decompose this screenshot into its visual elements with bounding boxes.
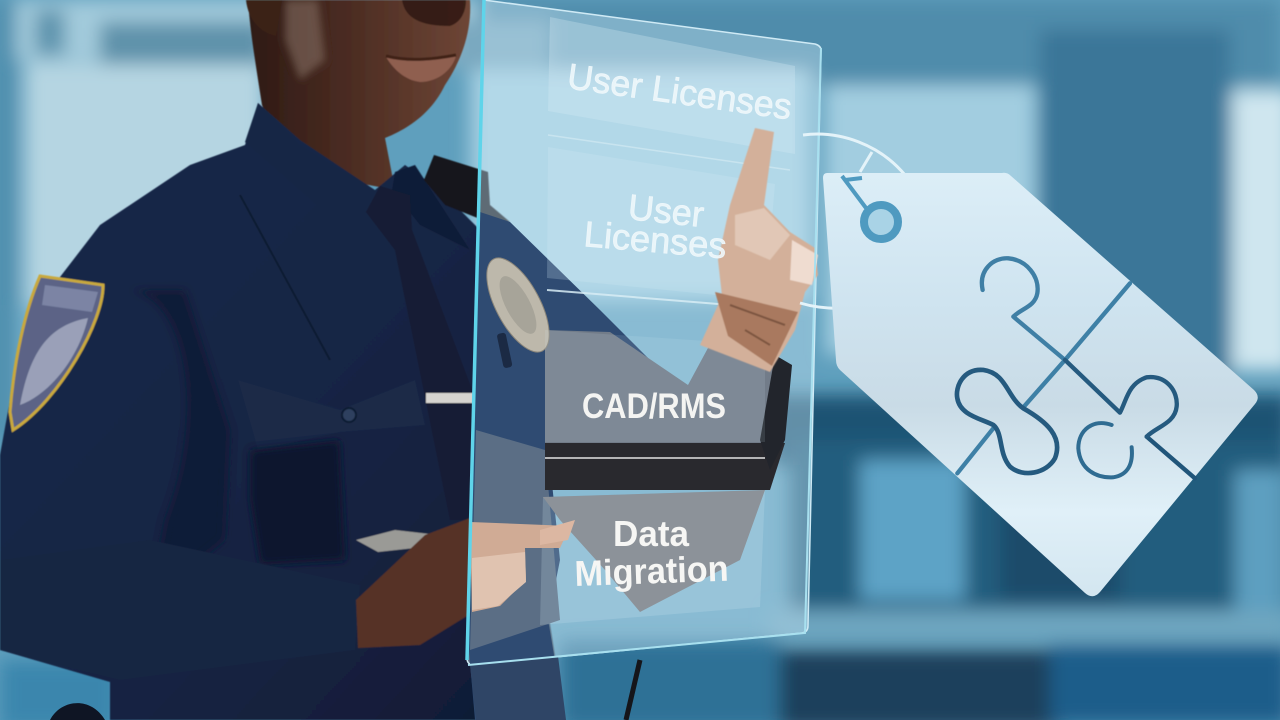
sleeve shadow xyxy=(130,290,230,600)
price tag xyxy=(800,134,1258,596)
pen xyxy=(356,530,430,552)
panel bottom edge xyxy=(468,48,821,665)
panel line lower xyxy=(545,457,765,459)
seam xyxy=(240,195,330,360)
cuff xyxy=(760,355,792,470)
tag hole xyxy=(864,205,898,239)
panel line upper xyxy=(548,135,790,170)
microphone stand xyxy=(626,660,640,720)
sleeve through panel xyxy=(545,330,785,445)
tag string xyxy=(800,134,925,308)
label: user licenses two: User xyxy=(626,186,706,235)
radio mic xyxy=(424,155,510,225)
label: CAD/RMS: CAD/RMS xyxy=(582,387,726,426)
belt item xyxy=(50,703,105,720)
chest through panel xyxy=(468,212,660,720)
pocket shadow xyxy=(250,440,345,565)
label: user licenses two xyxy=(582,186,728,266)
label: data migration: Migration xyxy=(574,548,729,594)
panel left edge xyxy=(467,0,484,660)
label: data migration: Data xyxy=(613,513,690,554)
lower torso through panel xyxy=(470,430,560,650)
pocket button xyxy=(342,408,356,422)
card 1 xyxy=(548,17,795,154)
card 3 xyxy=(545,330,765,442)
glass panel xyxy=(467,0,821,720)
lower hand xyxy=(356,518,480,648)
label: user licenses two: Licenses xyxy=(582,213,728,266)
fingers through panel xyxy=(470,520,575,612)
cheek highlight xyxy=(285,0,325,80)
uniform torso xyxy=(0,103,565,720)
nose shadow xyxy=(402,0,466,26)
label: data migration xyxy=(574,513,729,594)
torso below panel xyxy=(470,656,566,720)
mouth xyxy=(386,55,456,82)
ear xyxy=(246,0,282,36)
tie bar xyxy=(426,393,473,403)
card 4 xyxy=(540,490,765,625)
panel line middle xyxy=(547,290,767,308)
sleeve lower through panel xyxy=(543,490,765,612)
name pin xyxy=(497,332,513,368)
collar xyxy=(245,103,372,238)
tie xyxy=(366,186,476,520)
label: user licenses one: User Licenses xyxy=(565,55,794,127)
badge xyxy=(474,249,562,361)
officer xyxy=(0,0,565,720)
forearm xyxy=(0,540,360,680)
tag loop xyxy=(842,176,866,208)
puzzle lines xyxy=(957,258,1195,478)
panel body xyxy=(467,0,821,665)
head and neck xyxy=(248,0,470,190)
dark band through panel xyxy=(545,443,785,490)
pocket flap xyxy=(238,380,425,450)
tag body xyxy=(823,173,1258,596)
card 2 xyxy=(547,147,775,300)
pointing hand xyxy=(700,128,818,372)
collar right xyxy=(392,165,470,250)
shoulder patch xyxy=(10,276,103,430)
